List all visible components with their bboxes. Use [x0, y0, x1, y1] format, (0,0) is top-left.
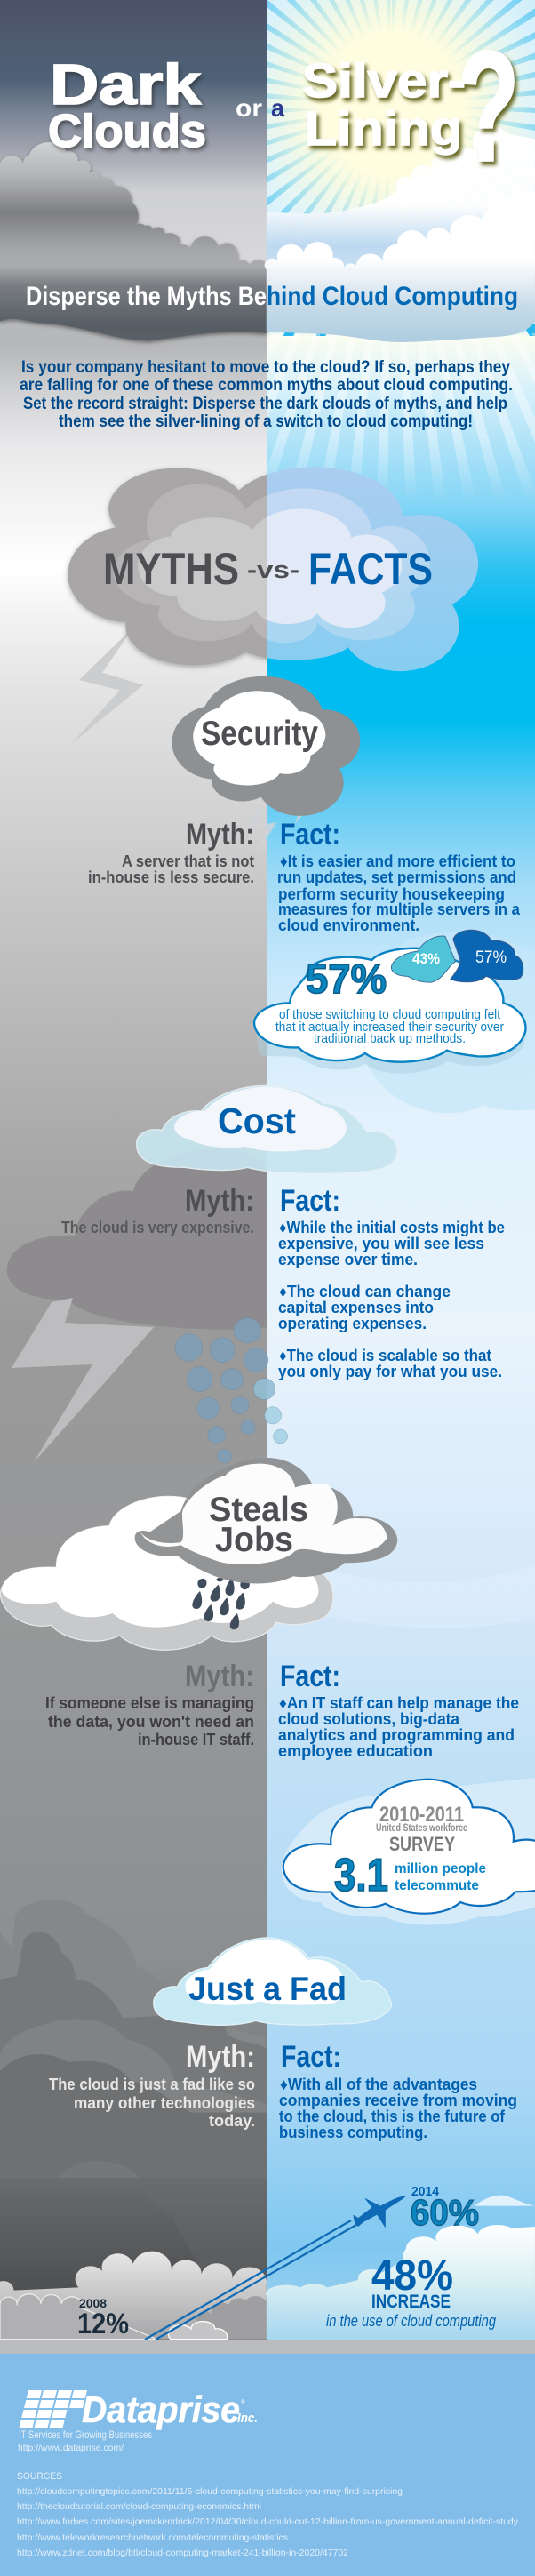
- survey cloud: 2010-2011: [379, 1803, 464, 1827]
- fact: jobs: [278, 1660, 519, 1760]
- left bottom storm clouds: [0, 1900, 267, 2178]
- heading: just a fad: Just a Fad: [188, 1971, 347, 2007]
- fact: cost: [278, 1184, 505, 1380]
- stat: 2008 12 percent: [77, 2296, 129, 2340]
- fact: jobs: employee education: [278, 1742, 433, 1760]
- fact: fad: Fact:: [281, 2040, 341, 2074]
- security cloud: [172, 676, 360, 857]
- bottom right white clouds: [266, 2196, 535, 2340]
- footer company text: [18, 2428, 152, 2453]
- icon: falling coins: [175, 1318, 288, 1463]
- stat cloud: 57 percent: traditional back up methods.: [314, 1031, 466, 1046]
- footer sources: http://cloudcomputingtopics.com/2011/11/5-cloud-computing-statistics-you-may-find-surprising: [17, 2486, 403, 2497]
- steals jobs upper cloud: [135, 1458, 397, 1583]
- survey cloud: million people: [395, 1861, 486, 1876]
- fact: cost: capital expenses into: [278, 1299, 434, 1316]
- survey cloud: SURVEY: [389, 1833, 455, 1855]
- fact: cost: operating expenses.: [278, 1315, 427, 1332]
- sun rays: [267, 0, 535, 336]
- fact: fad: to the cloud, this is the future of: [279, 2108, 506, 2125]
- fact: security: cloud environment.: [278, 916, 419, 934]
- fact: jobs: Fact:: [280, 1660, 340, 1693]
- cost dark cloud background: [7, 1149, 267, 1330]
- steals jobs lower cloud: [0, 1496, 333, 1650]
- bottom left dark cloud: [0, 2178, 267, 2340]
- icon: plane with contrails: [145, 2196, 406, 2340]
- myth: cost: The cloud is very expensive.: [61, 1219, 254, 1236]
- stat cloud: 57 percent: 57%: [306, 956, 387, 1002]
- title: Silver-Lining?: Silver-: [302, 54, 466, 108]
- footer grey band: [0, 2340, 535, 2354]
- footer sources: http://thecloudtutorial.com/cloud-computing-economics.html: [17, 2501, 261, 2512]
- just a fad cloud: [154, 1938, 392, 2025]
- myth: fad: Myth:: [186, 2040, 255, 2074]
- heading: myths vs facts: MYTHS: [103, 544, 239, 594]
- myth: security: A server that is not: [122, 852, 254, 870]
- stat: 48 percent increase: [326, 2252, 496, 2330]
- heading: myths vs facts: FACTS: [308, 544, 433, 594]
- myth: jobs: [45, 1660, 254, 1748]
- stat cloud: 57 percent: 57%: [475, 948, 507, 967]
- title: or a: [236, 94, 284, 122]
- footer sources: http://www.teleworkresearchnetwork.com/telecommuting-statistics: [17, 2532, 288, 2543]
- title: Dark Clouds: [48, 52, 206, 157]
- myth: security: Myth:: [186, 818, 254, 852]
- logo: Dataprise: Inc.: [237, 2411, 258, 2426]
- stat: 48 percent increase: INCREASE: [371, 2292, 451, 2312]
- heading: cost: Cost: [218, 1100, 296, 1141]
- fact: jobs: ♦An IT staff can help manage the: [279, 1694, 519, 1712]
- title: Dark Clouds: Clouds: [48, 106, 206, 157]
- intro paragraph: them see the silver-lining of a switch to cloud computing!: [59, 412, 473, 431]
- myth: jobs: If someone else is managing: [45, 1694, 254, 1712]
- footer background: [0, 2340, 535, 2576]
- myth: fad: [49, 2040, 255, 2130]
- cost cloud: [137, 1085, 397, 1173]
- fact: security: [277, 818, 521, 934]
- heading: myths vs facts: -vs-: [247, 556, 299, 583]
- heading: myths vs facts: [103, 544, 433, 594]
- pale right swooshes: [267, 1547, 535, 1628]
- survey cloud: [282, 1778, 535, 1924]
- stat: 2014 60 percent: 2014: [411, 2185, 439, 2199]
- subtitle: [26, 282, 518, 311]
- heading: steals jobs: Jobs: [215, 1521, 293, 1559]
- hero front white cloud: [265, 193, 535, 342]
- title: or a: a: [271, 94, 284, 122]
- fact: cost: ♦While the initial costs might be: [279, 1219, 505, 1236]
- lower pale rays: [267, 333, 535, 502]
- title: Dark Clouds: Dark: [50, 52, 201, 116]
- heading: security: Security: [201, 715, 318, 753]
- fact: security: perform security housekeeping: [278, 885, 505, 903]
- title: Silver-Lining?: [302, 18, 520, 195]
- fact: cost: you only pay for what you use.: [278, 1363, 502, 1380]
- left dark background: [0, 0, 267, 2340]
- 43 percent cloud: [391, 930, 523, 982]
- hero back white cloud: [267, 126, 535, 267]
- icon: logo grid: [20, 2390, 87, 2428]
- fact: cost: ♦The cloud is scalable so that: [279, 1347, 491, 1364]
- fact: jobs: cloud solutions, big-data: [278, 1710, 460, 1728]
- myth: fad: The cloud is just a fad like so: [49, 2076, 255, 2093]
- stat cloud: 57 percent: of those switching to cloud computing felt: [279, 1007, 501, 1022]
- sun glow: [267, 0, 535, 336]
- myth: cost: [61, 1184, 254, 1236]
- footer sources: http://www.forbes.com/sites/joemckendrick/2012/04/30/cloud-could-cut-12-billion-from-us-government-annual-deficit-study: [17, 2516, 519, 2527]
- myth: security: [88, 818, 254, 886]
- fact: cost: Fact:: [280, 1184, 340, 1218]
- stat: 2008 12 percent: 2008: [79, 2296, 107, 2310]
- fact: jobs: analytics and programming and: [278, 1726, 515, 1744]
- stat cloud: 57 percent: 43%: [412, 950, 440, 967]
- stat: 2014 60 percent: 60%: [411, 2192, 479, 2233]
- fact: fad: [279, 2040, 517, 2141]
- title: or a: or: [236, 94, 262, 122]
- logo: Dataprise: Dataprise: [82, 2388, 240, 2430]
- heading: steals jobs: [209, 1491, 308, 1559]
- stat: 48 percent increase: 48%: [371, 2252, 453, 2300]
- fact: security: run updates, set permissions and: [277, 868, 516, 886]
- myth: fad: many other technologies: [74, 2094, 255, 2112]
- survey cloud: telecommute: [395, 1878, 479, 1893]
- survey cloud: 3.1: [334, 1850, 388, 1901]
- myth: cost: Myth:: [185, 1184, 254, 1218]
- fact: security: ♦It is easier and more efficient to: [280, 852, 515, 870]
- footer company text: IT Services for Growing Businesses: [19, 2428, 152, 2441]
- title: Silver-Lining?: Lining: [305, 102, 462, 156]
- survey cloud: United States workforce: [376, 1823, 467, 1834]
- footer sources: SOURCES: [17, 2471, 62, 2482]
- myth: fad: today.: [209, 2112, 255, 2130]
- intro paragraph: [20, 358, 513, 431]
- fact: cost: expensive, you will see less: [278, 1235, 484, 1252]
- icon: raindrops: [192, 1578, 250, 1629]
- stat: 48 percent increase: in the use of cloud computing: [326, 2312, 496, 2330]
- myth: jobs: Myth:: [185, 1660, 254, 1693]
- myth: jobs: in-house IT staff.: [138, 1731, 254, 1748]
- fact: fad: business computing.: [279, 2124, 427, 2141]
- logo: Dataprise: ®: [241, 2399, 245, 2405]
- fact: fad: ♦With all of the advantages: [280, 2076, 477, 2093]
- heading: steals jobs: Steals: [209, 1491, 308, 1529]
- stat: 2008 12 percent: 12%: [77, 2308, 129, 2340]
- fact: security: Fact:: [280, 818, 340, 852]
- bottom left light clouds: [0, 2252, 267, 2340]
- fact: cost: ♦The cloud can change: [279, 1283, 451, 1300]
- hero dark cloud: [0, 142, 267, 340]
- fact: cost: expense over time.: [278, 1251, 418, 1268]
- myth: jobs: the data, you won't need an: [48, 1713, 254, 1731]
- myths vs facts cloud: [68, 467, 478, 671]
- right bright background: [267, 0, 535, 2340]
- footer company text: http://www.dataprise.com/: [18, 2443, 124, 2453]
- stat cloud: 57 percent: [254, 930, 527, 1074]
- fact: fad: companies receive from moving: [279, 2092, 517, 2109]
- footer sources: [17, 2471, 519, 2558]
- stat cloud: 57 percent: that it actually increased their security over: [275, 1020, 504, 1035]
- pale background cloud behind stat: [362, 932, 535, 1113]
- icon: lightning bolt under cost cloud: [12, 1298, 154, 1462]
- myth: security: in-house is less secure.: [88, 868, 254, 886]
- icon: lightning bolt under myths cloud: [71, 625, 143, 744]
- fact: security: measures for multiple servers in a: [278, 900, 521, 918]
- subtitle: Disperse the Myths Be: [26, 282, 267, 311]
- footer sources: http://www.zdnet.com/blog/btl/cloud-computing-market-241-billion-in-2020/47702: [17, 2548, 348, 2558]
